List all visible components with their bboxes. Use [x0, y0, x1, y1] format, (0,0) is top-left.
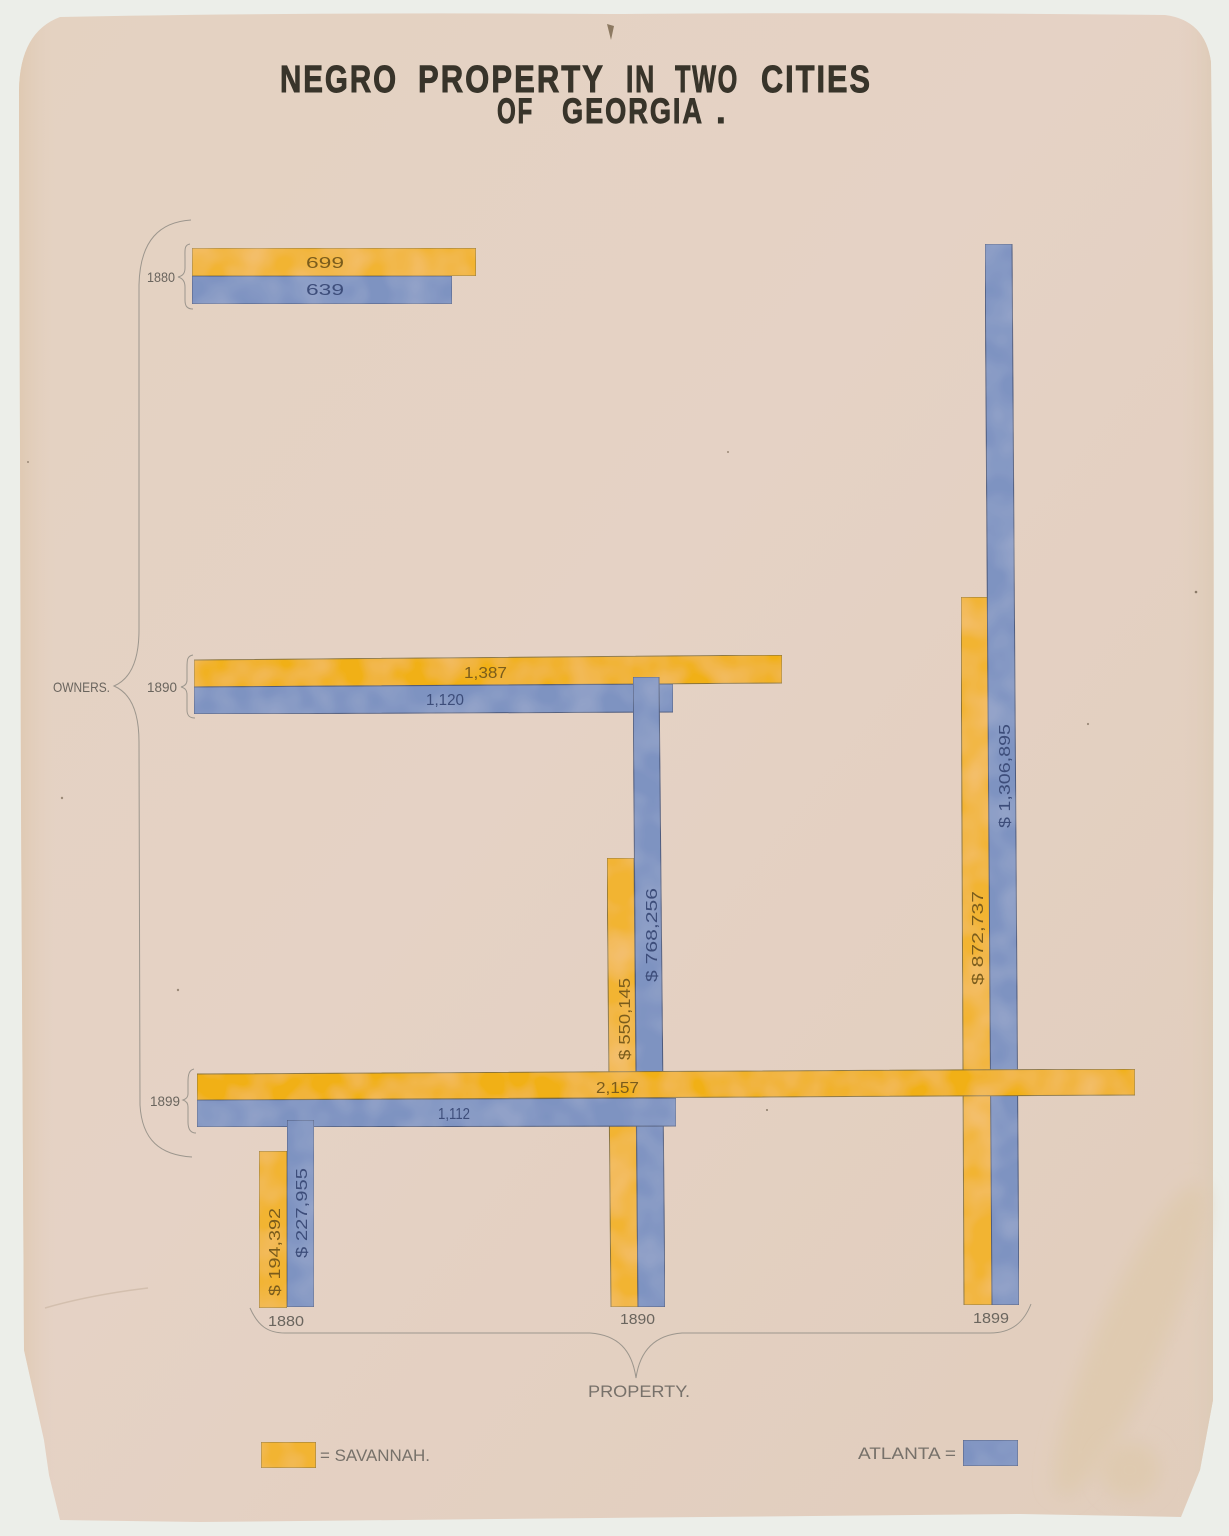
- bar: Savannah property 1890: [607, 858, 638, 1307]
- legend: Atlanta: [858, 1440, 1018, 1466]
- title: .: [716, 92, 728, 131]
- bar: Atlanta owners 1880: [192, 276, 452, 304]
- value 1,120: 1,120: [426, 692, 464, 709]
- value $872,737: $ 872,737: [970, 891, 987, 985]
- value $194,392: $ 194,392: [267, 1208, 284, 1296]
- property 1890 bars: [607, 677, 665, 1307]
- value $550,145: $ 550,145: [617, 978, 634, 1060]
- bar: Savannah owners 1899: [197, 1069, 1135, 1100]
- owners 1880 group: [147, 244, 476, 309]
- value 2,157: 2,157: [596, 1080, 639, 1097]
- axis year 1880: 1880: [268, 1313, 304, 1330]
- bar: Savannah owners 1890: [194, 655, 782, 687]
- bar: Atlanta owners 1899: [197, 1098, 676, 1127]
- axis year 1899: 1899: [973, 1310, 1009, 1327]
- value 1,112: 1,112: [438, 1106, 470, 1123]
- bar: Atlanta owners 1890: [194, 684, 673, 714]
- owners 1890 group: [147, 655, 782, 718]
- bar: Savannah property 1899: [961, 597, 993, 1305]
- value 699: 699: [306, 255, 344, 272]
- bottom brace: property: [250, 1304, 1031, 1378]
- bar: Savannah property 1880: [259, 1151, 287, 1308]
- bar: Atlanta property 1880: [287, 1120, 314, 1307]
- axis year 1890: 1890: [620, 1311, 655, 1328]
- owners 1899 group: [150, 1069, 1135, 1133]
- value $1,306,895: $ 1,306,895: [997, 724, 1014, 828]
- title: TWO: [675, 59, 739, 101]
- title: IN: [626, 59, 656, 101]
- label: property: PROPERTY.: [588, 1382, 690, 1401]
- small brace 1890: [181, 655, 195, 718]
- title: [280, 59, 872, 131]
- legend: Savannah: [261, 1442, 430, 1468]
- value $768,256: $ 768,256: [644, 888, 661, 982]
- small brace 1880: [178, 244, 193, 309]
- title: PROPERTY: [418, 59, 605, 101]
- year label 1890: 1890: [147, 679, 177, 695]
- bar: Savannah owners 1880: [192, 248, 476, 276]
- value $227,955: $ 227,955: [294, 1168, 311, 1258]
- value 1,387: 1,387: [464, 665, 507, 682]
- bar: Atlanta property 1899: [985, 244, 1019, 1305]
- year label 1880: 1880: [147, 269, 175, 285]
- year label 1899: 1899: [150, 1093, 180, 1109]
- title: NEGRO: [280, 59, 398, 101]
- property 1899 bars: [961, 244, 1019, 1305]
- property 1880 bars: [259, 1120, 314, 1308]
- large brace: owners: [114, 220, 192, 1157]
- label: owners: OWNERS.: [53, 679, 110, 695]
- bar: Atlanta property 1890: [633, 677, 665, 1307]
- legend: Atlanta: ATLANTA =: [858, 1444, 956, 1463]
- value 639: 639: [306, 282, 344, 299]
- title: OF: [497, 92, 534, 131]
- title: CITIES: [761, 59, 872, 101]
- legend: Savannah: = SAVANNAH.: [320, 1446, 430, 1465]
- title: GEORGIA: [562, 92, 704, 131]
- small brace 1899: [183, 1069, 196, 1133]
